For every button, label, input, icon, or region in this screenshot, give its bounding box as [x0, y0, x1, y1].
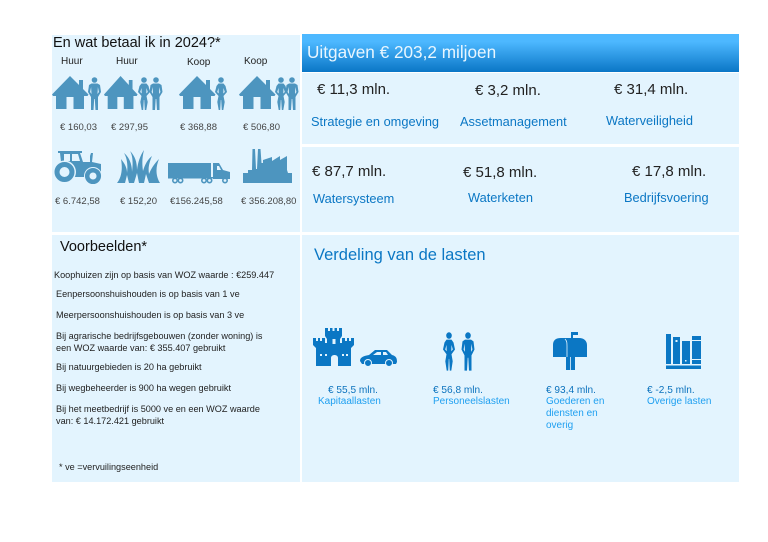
price: tractor: € 6.742,58	[55, 196, 100, 207]
label: waterketen: Waterketen	[468, 190, 533, 205]
icon: house with one person	[52, 76, 101, 110]
label: watersysteem: Watersysteem	[313, 191, 394, 206]
icon: factory	[243, 149, 292, 183]
amount: personeelslasten: € 56,8 mln.	[433, 385, 483, 396]
panel: what do I pay	[52, 35, 300, 232]
icon: reeds	[117, 150, 160, 183]
price: 160,03: € 160,03	[60, 122, 97, 133]
price: 368,88: € 368,88	[180, 122, 217, 133]
amount: assetmanagement: € 3,2 mln.	[475, 82, 541, 99]
panel: expenditure row 2	[302, 147, 739, 232]
text: nature areas: Bij natuurgebieden is 20 ha gebruikt	[56, 362, 202, 372]
label: goederen en diensten: overig	[546, 420, 573, 431]
amount: watersysteem: € 87,7 mln.	[312, 163, 386, 180]
price: truck: €156.245,58	[170, 196, 223, 207]
label: goederen en diensten: diensten en	[546, 408, 598, 419]
price: reeds: € 152,20	[120, 196, 157, 207]
panel: examples	[52, 235, 300, 482]
heading: what do I pay: En wat betaal ik in 2024?*	[53, 35, 221, 51]
text: metered company: Bij het meetbedrijf is 5000 ve en een WOZ waarde	[56, 404, 260, 414]
label: assetmanagement: Assetmanagement	[460, 114, 567, 129]
icon: two persons	[443, 332, 474, 371]
icon: truck	[168, 163, 230, 184]
text: owner homes: Koophuizen zijn op basis van WOZ waarde : €259.447	[54, 270, 274, 280]
price: 297,95: € 297,95	[111, 122, 148, 133]
label: strategie: Strategie en omgeving	[311, 114, 439, 129]
label: goederen en diensten	[546, 396, 604, 431]
amount: strategie: € 11,3 mln.	[317, 81, 390, 98]
label: waterveiligheid: Waterveiligheid	[606, 113, 693, 128]
text: agricultural buildings: een WOZ waarde van: € 355.407 gebruikt	[56, 343, 225, 353]
label: koop 1: Koop	[187, 57, 210, 68]
icon: house with one person, owner	[179, 76, 227, 110]
text: multi-person household: Meerpersoonshuishouden is op basis van 3 ve	[56, 310, 244, 320]
icon: books	[666, 334, 701, 369]
footnote: * ve =vervuilingseenheid	[59, 462, 158, 472]
heading: examples: Voorbeelden*	[60, 239, 147, 255]
text: agricultural buildings: Bij agrarische bedrijfsgebouwen (zonder woning) is	[56, 331, 262, 341]
panel: expenditure row 1	[302, 73, 739, 144]
label: huur 2: Huur	[116, 56, 138, 67]
icon: house with two persons	[104, 76, 162, 110]
icon: tractor	[54, 151, 102, 184]
amount: goederen en diensten: € 93,4 mln.	[546, 385, 596, 396]
label: goederen en diensten: Goederen en	[546, 396, 604, 407]
amount: waterketen: € 51,8 mln.	[463, 164, 537, 181]
label: huur 1: Huur	[61, 56, 83, 67]
label: kapitaallasten: Kapitaallasten	[318, 396, 381, 407]
amount: waterveiligheid: € 31,4 mln.	[614, 81, 688, 98]
heading: distribution of costs: Verdeling van de lasten	[314, 246, 486, 264]
icon: mailbox	[553, 332, 587, 370]
text: agricultural buildings	[56, 331, 262, 353]
price: 506,80: € 506,80	[243, 122, 280, 133]
label: overige lasten: Overige lasten	[647, 396, 711, 407]
price: factory: € 356.208,80	[241, 196, 296, 207]
panel: distribution of costs	[302, 235, 739, 482]
amount: overige lasten: € -2,5 mln.	[647, 385, 695, 396]
icon: house with two persons, owner	[239, 76, 298, 110]
text: road authority: Bij wegbeheerder is 900 ha wegen gebruikt	[56, 383, 231, 393]
header: expenditure: Uitgaven € 203,2 miljoen	[307, 42, 496, 62]
text: metered company: van: € 14.172.421 gebruikt	[56, 416, 164, 426]
header: expenditure	[302, 34, 739, 72]
amount: kapitaallasten: € 55,5 mln.	[328, 385, 378, 396]
label: personeelslasten: Personeelslasten	[433, 396, 510, 407]
icon: car	[360, 350, 397, 366]
amount: bedrijfsvoering: € 17,8 mln.	[632, 163, 706, 180]
icon: castle	[313, 328, 354, 366]
label: koop 2: Koop	[244, 56, 267, 67]
label: bedrijfsvoering: Bedrijfsvoering	[624, 190, 709, 205]
text: one-person household: Eenpersoonshuishouden is op basis van 1 ve	[56, 289, 240, 299]
text: metered company	[56, 404, 260, 426]
